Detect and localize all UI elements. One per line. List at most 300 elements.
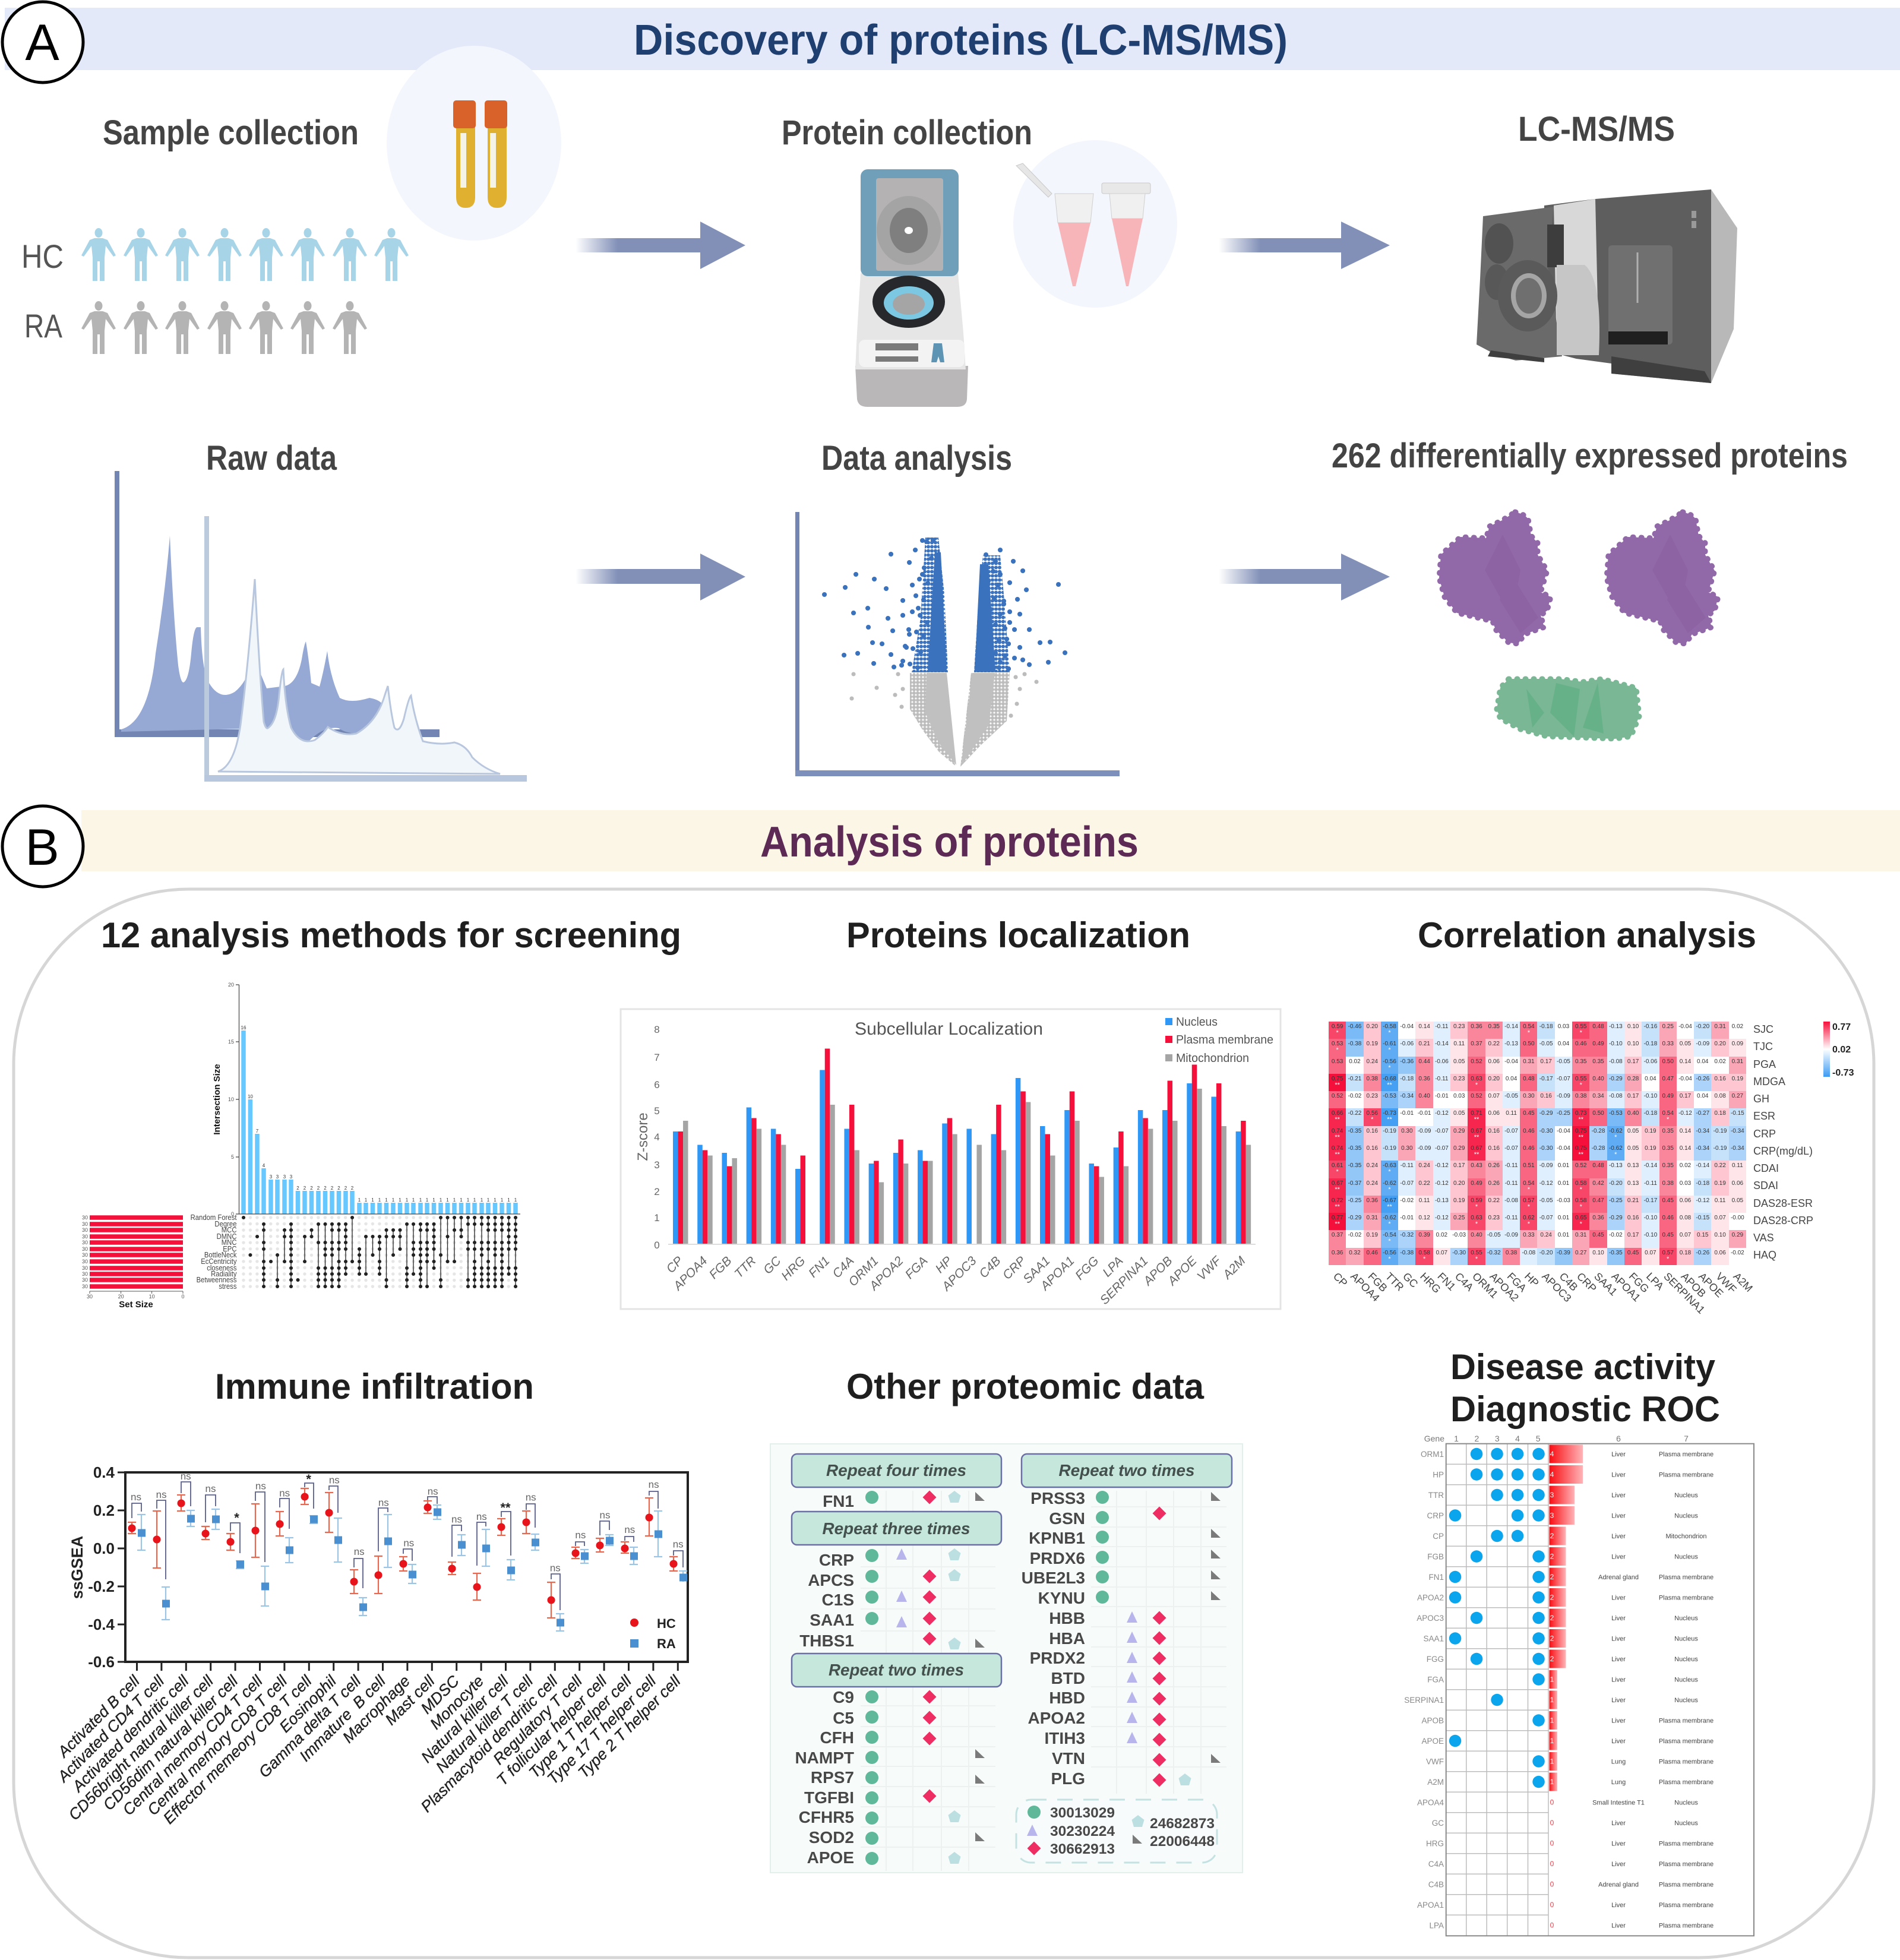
heatmap: correlation matrix: -0.09 [1557,1093,1570,1099]
heatmap: correlation matrix: * [1528,1221,1530,1228]
heatmap: correlation matrix: 0.48 [1592,1162,1604,1169]
gene names left: SOD2 [809,1828,854,1847]
heatmap: correlation matrix: 0.05 [1680,1041,1691,1047]
table column headers: Gene [1424,1434,1444,1443]
heatmap: correlation matrix: -0.68 [1383,1076,1396,1082]
x axis cell labels: T follicular helper cell [493,1671,611,1789]
heading: protein collection: Protein collection [782,113,1032,152]
heatmap: correlation matrix: -0.19 [1383,1145,1396,1152]
upset bar value labels: 4 [263,1163,265,1168]
heatmap: correlation matrix: ** [1335,1116,1340,1123]
y tick labels: 0.2 [93,1501,115,1519]
heading: raw data: Raw data [206,439,337,478]
gene names left: C1S [822,1591,854,1609]
gene names: HP [1433,1471,1444,1479]
panel: other proteomic data [770,1444,1243,1873]
x axis gene labels: APOA4 [670,1254,710,1294]
x axis cell labels: Central memory CD8 T cell [144,1671,291,1819]
heatmap: correlation matrix: -0.19 [1383,1128,1396,1134]
heatmap: correlation matrix: -0.17 [1539,1076,1553,1082]
upset bar value labels: 1 [440,1197,442,1203]
heatmap: correlation matrix: 0.19 [1732,1076,1743,1082]
heatmap: correlation matrix: 0.31 [1732,1058,1743,1065]
upset set-size ticks: 30 [87,1294,93,1300]
chart: upset plot [82,982,520,1310]
heatmap: correlation matrix: 0.01 [1558,1180,1569,1187]
upset y tick labels: 0 [231,1211,234,1217]
banner: section B [81,810,1900,871]
gene names left: C9 [833,1688,854,1706]
heatmap: correlation matrix: 0.20 [1366,1023,1378,1030]
y axis labels: 2 [654,1186,660,1197]
gene names right: PRDX6 [1030,1549,1085,1567]
heatmap: correlation matrix: -0.27 [1696,1110,1709,1117]
tissue column: Liver [1611,1861,1626,1868]
gene names right: GSN [1049,1509,1085,1528]
gene names: SAA1 [1423,1635,1444,1643]
upset bar value labels: 10 [248,1094,253,1099]
marker legend: 30662913 [1050,1841,1115,1857]
heatmap: correlation matrix: 0.27 [1732,1093,1743,1099]
upset bar value labels: 1 [426,1197,429,1203]
heatmap: correlation matrix: 0.37 [1471,1041,1482,1047]
heatmap: correlation matrix: * [1614,1134,1617,1141]
tissue column: Liver [1611,1492,1626,1499]
heatmap row labels: GH [1753,1093,1769,1105]
gene names left: CFH [820,1728,854,1747]
label: HC: HC [21,238,64,275]
heatmap: correlation matrix: -0.54 [1383,1232,1396,1238]
heatmap: correlation matrix: 0.16 [1488,1145,1500,1152]
heatmap: correlation matrix: -0.05 [1539,1041,1553,1047]
legend [630,1616,676,1651]
upset bar value labels: 3 [270,1174,273,1180]
heatmap: correlation matrix: -0.13 [1504,1041,1518,1047]
ns labels: ns [476,1511,487,1522]
gene names left: SAA1 [810,1611,854,1629]
heatmap: correlation matrix: -0.07 [1400,1180,1414,1187]
x axis gene labels: C4A [830,1254,857,1281]
heatmap: correlation matrix: -0.01 [1400,1110,1414,1117]
heatmap: correlation matrix: 0.34 [1592,1093,1604,1099]
heatmap: correlation matrix: -0.29 [1609,1076,1623,1082]
heatmap: correlation matrix: 0.52 [1575,1162,1586,1169]
heatmap: correlation matrix: 0.01 [1558,1215,1569,1221]
heatmap: correlation matrix: 0.51 [1523,1162,1535,1169]
heatmap: correlation matrix: 0.05 [1453,1058,1465,1065]
heatmap: correlation matrix: -0.11 [1505,1162,1518,1169]
heatmap: correlation matrix: -0.15 [1731,1110,1744,1117]
heatmap: correlation matrix: -0.10 [1609,1041,1623,1047]
ns labels: ns [255,1480,266,1492]
heatmap: correlation matrix: 0.02 [1436,1232,1447,1238]
bars: nucleus [675,1070,1238,1244]
heatmap: correlation matrix: * [1388,1064,1391,1071]
tissue column: Liver [1611,1472,1626,1479]
heatmap: correlation matrix: ** [1335,1221,1340,1228]
upset bar value labels: 2 [310,1186,313,1191]
upset bar value labels: 1 [453,1197,456,1203]
upset set names: Degree [214,1219,237,1228]
heatmap: correlation matrix: 0.31 [1523,1058,1535,1065]
heatmap: correlation matrix: 0.35 [1662,1162,1674,1169]
upset set-size ticks: 10 [149,1294,155,1300]
repeat header: four times [792,1454,1001,1487]
upset bar value labels: 2 [331,1186,334,1191]
count values: 1 [1550,1778,1554,1786]
heatmap: correlation matrix: * [1388,1029,1391,1036]
heatmap: correlation matrix: 0.58 [1418,1250,1430,1256]
heatmap: correlation matrix: 0.06 [1680,1197,1691,1204]
x axis cell labels: Monocyte [426,1672,487,1733]
y tick labels: 0.4 [93,1463,115,1481]
heatmap: correlation matrix: -0.30 [1452,1250,1466,1256]
heatmap column labels: CP [1331,1270,1350,1289]
ns labels: ns [156,1489,167,1500]
arrow: raw data to analysis [576,554,745,600]
legend: RA [657,1636,676,1651]
heading: disease activity diagnostic ROC: Disease activity [1450,1347,1716,1387]
tissue column: Lung [1611,1779,1626,1786]
heatmap row labels: CDAI [1753,1162,1779,1174]
y tick labels [88,1463,115,1671]
heatmap: correlation matrix: -0.04 [1400,1023,1414,1030]
x axis cell labels: MDSC [418,1671,463,1717]
icon: centrifuge [855,169,968,407]
heatmap: correlation matrix: 0.23 [1488,1215,1500,1221]
location column: Plasma membrane [1659,1594,1714,1601]
heatmap: correlation matrix: 0.71 [1471,1110,1482,1117]
count values: 0 [1550,1921,1554,1929]
heatmap: correlation matrix: 0.28 [1627,1076,1639,1082]
upset bar value labels: 2 [304,1186,306,1191]
marker legend: 22006448 [1150,1833,1215,1850]
heatmap: correlation matrix: 0.17 [1627,1093,1639,1099]
upset matrix connectors [264,1218,516,1286]
tissue column: Liver [1611,1697,1626,1704]
heatmap: correlation matrix: 0.40 [1471,1232,1482,1238]
panel label A [2,2,83,83]
gene names right: HBB [1049,1609,1085,1627]
heatmap: correlation matrix: * [1528,1029,1530,1036]
heatmap: correlation matrix: * [1388,1238,1391,1245]
heatmap: correlation matrix: -0.58 [1383,1023,1396,1030]
heatmap: correlation matrix: -0.36 [1400,1058,1414,1065]
heatmap: correlation matrix: 0.16 [1627,1215,1639,1221]
count values: 4 [1550,1450,1554,1458]
arrow: protein to LC-MS/MS [1219,222,1390,269]
heatmap: correlation matrix: -0.18 [1643,1110,1657,1117]
x axis gene labels: APOA1 [1037,1254,1077,1294]
heatmap: correlation matrix: -0.01 [1435,1093,1449,1099]
heatmap: correlation matrix: 0.19 [1714,1180,1726,1187]
heatmap: correlation matrix: ** [1578,1134,1583,1141]
gene names: CP [1433,1532,1444,1541]
x axis gene labels: APOB [1140,1254,1175,1289]
bars: plasma membrane [681,1049,1243,1244]
heatmap: correlation matrix: -0.25 [1557,1110,1570,1117]
ns labels: ns [526,1492,536,1503]
heatmap: correlation matrix: 0.54 [1523,1023,1535,1030]
heatmap: correlation matrix: -0.08 [1504,1197,1518,1204]
heatmap: correlation matrix: 0.74 [1332,1145,1343,1152]
heatmap: correlation matrix: ** [1335,1151,1340,1158]
heatmap: correlation matrix: -0.12 [1696,1197,1709,1204]
gene names: FN1 [1428,1573,1444,1582]
x axis gene labels: FGA [903,1254,931,1282]
upset matrix dots [244,1218,516,1286]
x axis cell labels: Type 2 T helper cell [574,1671,684,1781]
heatmap column labels: FGG [1627,1270,1651,1295]
heatmap: correlation matrix: 0.19 [1645,1145,1656,1152]
bars: mitochondrion [685,1089,1248,1244]
y axis labels: 7 [654,1052,660,1063]
x axis gene labels: SERPINA1 [1098,1254,1151,1307]
heatmap: correlation matrix: -0.34 [1400,1093,1414,1099]
upset bar value labels: 2 [296,1186,299,1191]
upset set names: DMNC [217,1232,237,1241]
heatmap: correlation matrix: 0.59 [1332,1023,1343,1030]
heatmap: correlation matrix: 0.43 [1471,1162,1482,1169]
heatmap: correlation matrix: -0.53 [1383,1093,1396,1099]
y axis labels [654,1024,660,1251]
heatmap: correlation matrix: 0.14 [1418,1023,1430,1030]
legend: Nucleus [1176,1016,1218,1029]
gene names: APOE [1421,1737,1444,1746]
heatmap: correlation matrix: 0.57 [1662,1250,1674,1256]
heading: sample collection: Sample collection [103,113,359,152]
x ticks [137,1662,678,1671]
upset set names: closeness [207,1263,237,1272]
upset set-size labels: 30 [82,1277,88,1283]
x axis gene labels: CP [664,1254,686,1276]
gene names right: HBA [1049,1629,1085,1648]
heatmap: correlation matrix: 0.33 [1523,1232,1535,1238]
count values: 2 [1550,1655,1554,1663]
gene names: TTR [1428,1491,1444,1500]
heatmap: correlation matrix: -0.04 [1678,1076,1692,1082]
heatmap: correlation matrix: -0.14 [1696,1162,1709,1169]
heatmap: correlation matrix: 0.52 [1332,1093,1343,1099]
heatmap: correlation matrix: ** [1335,1134,1340,1141]
upset set names: MCC [222,1225,237,1234]
location column: Plasma membrane [1659,1718,1714,1725]
panel label B: B [25,819,59,876]
baseline [668,1244,1256,1245]
heatmap row labels: TJC [1753,1041,1773,1052]
upset bar value labels: 2 [317,1186,320,1191]
heatmap: correlation matrix: 0.45 [1523,1110,1535,1117]
heatmap: correlation matrix: 0.20 [1453,1180,1465,1187]
heatmap: correlation matrix: 0.55 [1471,1250,1482,1256]
heatmap: correlation matrix: 0.45 [1592,1232,1604,1238]
heatmap: correlation matrix: -0.17 [1643,1197,1657,1204]
heatmap: correlation matrix: 0.54 [1523,1180,1535,1187]
heatmap: correlation matrix: -0.62 [1383,1180,1396,1187]
gene names: APOA2 [1417,1593,1444,1602]
heatmap: correlation matrix: -0.03 [1557,1197,1570,1204]
x axis cell labels: Eosinophil [276,1671,340,1736]
heatmap: correlation matrix: 0.22 [1488,1041,1500,1047]
upset set-size labels: 30 [82,1246,88,1252]
heatmap row labels: ESR [1753,1110,1775,1122]
heatmap: correlation matrix: 0.05 [1732,1197,1743,1204]
heatmap: correlation matrix: -0.04 [1557,1145,1570,1152]
y ticks [118,1472,125,1662]
ns labels: ns [329,1475,340,1486]
ns labels: ns [206,1483,216,1494]
significance stars: ** [500,1500,511,1515]
heatmap: correlation matrix: -0.07 [1504,1145,1518,1152]
count values: 1 [1550,1696,1554,1704]
heatmap column labels: APOC3 [1539,1270,1574,1304]
table column headers [1424,1434,1689,1443]
upset bar value labels: 1 [358,1197,361,1203]
ns labels: ns [181,1471,191,1482]
icon: purple protein 1 [1439,512,1551,644]
heatmap: correlation matrix: -0.09 [1418,1145,1431,1152]
y axis title: Z-score [635,1112,651,1161]
heatmap: correlation matrix: 0.52 [1471,1058,1482,1065]
location column: Plasma membrane [1659,1902,1714,1909]
significance stars: * [306,1472,311,1487]
count values: 1 [1550,1716,1554,1725]
heatmap: correlation matrix: -0.08 [1609,1093,1623,1099]
heatmap: correlation matrix: * [1580,1082,1582,1089]
heatmap: correlation matrix: -0.02 [1731,1250,1744,1256]
heatmap: correlation matrix: 0.17 [1540,1058,1552,1065]
heatmap: correlation matrix: 0.29 [1453,1128,1465,1134]
heatmap: correlation matrix: -0.05 [1557,1058,1570,1065]
upset set names: Betweenness [197,1275,237,1284]
heatmap: correlation matrix: -0.35 [1348,1145,1361,1152]
heatmap: correlation matrix: 0.13 [1627,1162,1639,1169]
heatmap: correlation matrix: -0.09 [1539,1162,1553,1169]
heatmap: correlation matrix [1329,1022,1746,1265]
location column: Plasma membrane [1659,1922,1714,1929]
upset set-size ticks: 20 [118,1294,124,1300]
heatmap column labels: C4B [1557,1270,1580,1294]
count values: 2 [1550,1614,1554,1622]
heatmap: correlation matrix: -0.25 [1348,1197,1361,1204]
heatmap: correlation matrix: 0.50 [1523,1041,1535,1047]
x axis cell labels: Activated dendritic cell [68,1671,192,1796]
legend: Plasma membrane [1176,1033,1273,1047]
HC markers [132,1497,674,1600]
heatmap: correlation matrix: 0.09 [1732,1041,1743,1047]
RA markers [138,1512,687,1623]
upset set-size labels: 30 [82,1234,88,1240]
x axis cell labels: Activated CD4 T cell [53,1671,168,1786]
significance stars [234,1472,511,1525]
upset set-size labels: 30 [82,1259,88,1264]
heatmap: correlation matrix: 0.24 [1366,1058,1378,1065]
heatmap: correlation matrix: 0.10 [1627,1041,1639,1047]
heatmap: correlation matrix: 0.36 [1332,1250,1343,1256]
heatmap row labels [1753,1023,1813,1261]
gene names left: CFHR5 [799,1808,854,1826]
heatmap: correlation matrix: 0.24 [1540,1232,1552,1238]
HC error bars [128,1488,678,1618]
heatmap: correlation matrix: 0.40 [1627,1110,1639,1117]
heatmap: correlation matrix: 0.08 [1714,1093,1726,1099]
heatmap: correlation matrix: -0.01 [1418,1110,1431,1117]
heatmap: correlation matrix: * [1475,1203,1478,1210]
heatmap: correlation matrix: 0.39 [1418,1232,1430,1238]
heatmap: correlation matrix: -0.38 [1400,1250,1414,1256]
heatmap: correlation matrix: 0.06 [1488,1058,1500,1065]
heatmap column labels: APOA2 [1487,1270,1521,1304]
upset bar value labels [241,1025,517,1203]
x axis cell labels: Mast cell [381,1671,438,1728]
x axis cell labels: Natural killer cell [418,1671,513,1766]
x axis cell labels: Central memory CD4 T cell [119,1671,267,1819]
heatmap: correlation matrix: 0.07 [1714,1215,1726,1221]
heatmap: correlation matrix: ** [1387,1203,1392,1210]
heatmap: correlation matrix: 0.26 [1488,1180,1500,1187]
heatmap: correlation matrix: 0.08 [1680,1215,1691,1221]
upset set names: stress [219,1282,236,1291]
heatmap: correlation matrix: 0.49 [1662,1093,1674,1099]
panel background [770,1444,1243,1873]
ns labels: ns [624,1524,635,1535]
heatmap: correlation matrix: -0.08 [1609,1058,1623,1065]
heatmap column labels: SAA1 [1592,1270,1620,1298]
heatmap: correlation matrix: 0.47 [1592,1197,1604,1204]
heatmap: correlation matrix: 0.06 [1714,1250,1726,1256]
x axis gene labels: APOE [1165,1254,1200,1289]
heatmap: correlation matrix: 0.30 [1401,1145,1413,1152]
heatmap: correlation matrix: * [1475,1082,1478,1089]
heatmap: correlation matrix: -0.63 [1383,1162,1396,1169]
heatmap: correlation matrix: 0.06 [1488,1110,1500,1117]
y tick labels: -0.6 [88,1653,115,1671]
heatmap: correlation matrix: 0.10 [1627,1023,1639,1030]
heatmap: correlation matrix: -0.34 [1731,1145,1744,1152]
heatmap: correlation matrix: ** [1335,1203,1340,1210]
icon: blood tube circle [387,46,561,241]
gene names left: CRP [819,1551,854,1569]
heatmap: correlation matrix: -0.12 [1435,1215,1449,1221]
gene names right [1022,1489,1085,1788]
gene names: APOA1 [1417,1901,1444,1910]
upset set-size axis [90,1291,183,1294]
heading: data analysis: Data analysis [821,439,1012,478]
tissue column: Liver [1611,1676,1626,1683]
heatmap: correlation matrix: 0.74 [1332,1128,1343,1134]
heatmap: correlation matrix: 0.45 [1627,1250,1639,1256]
heatmap: correlation matrix: 0.04 [1558,1041,1569,1047]
heatmap: correlation matrix: 0.23 [1366,1093,1378,1099]
heatmap color scale: -0.73 [1832,1068,1854,1078]
chart title: Subcellular Localization [855,1019,1043,1039]
repeat header: four times: Repeat four times [826,1461,966,1480]
gene names: HRG [1426,1839,1444,1848]
location column: Nucleus [1674,1656,1698,1663]
heatmap: correlation matrix: * [1580,1203,1582,1210]
heatmap: correlation matrix: * [1371,1116,1373,1123]
arrow: sample to protein [576,222,745,269]
panel: analysis container [14,889,1874,1958]
upset bar value labels: 16 [241,1025,246,1030]
heatmap: correlation matrix: -0.18 [1400,1076,1414,1082]
heatmap: correlation matrix: 0.49 [1471,1180,1482,1187]
heatmap: correlation matrix: 0.40 [1592,1076,1604,1082]
heatmap: correlation matrix: 0.04 [1645,1076,1656,1082]
heatmap: correlation matrix: * [1580,1186,1582,1193]
upset set names: Radiality [211,1269,237,1278]
gene names left: APOE [807,1848,854,1867]
